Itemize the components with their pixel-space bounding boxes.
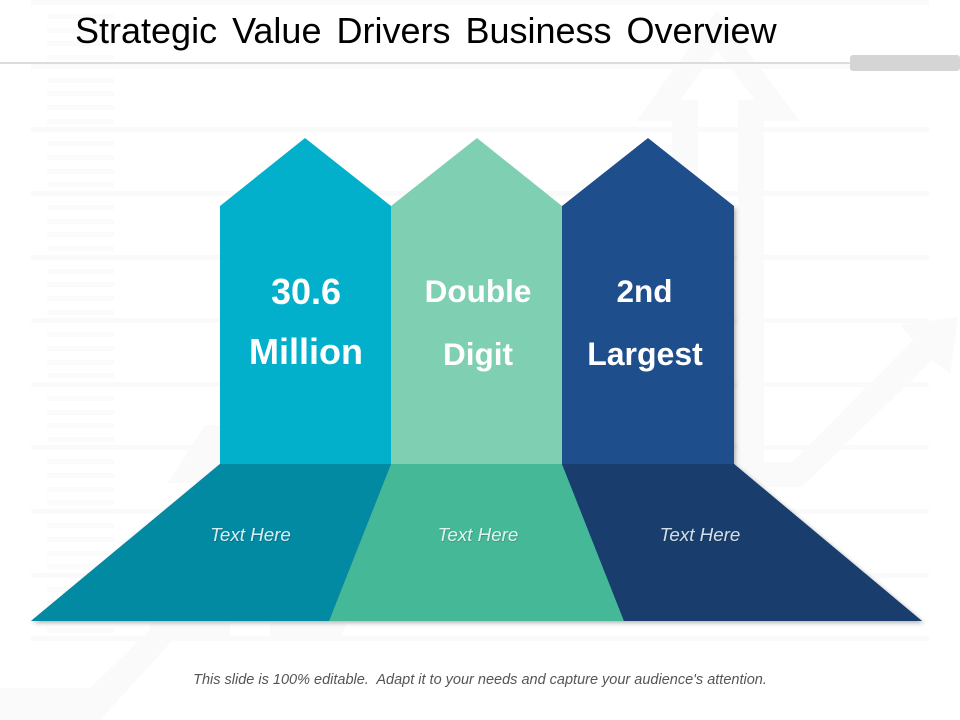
base panel 2: green <box>329 464 624 621</box>
header tab <box>850 55 960 71</box>
arrow 1: cyan: 30.6 <box>271 271 341 312</box>
arrow 3: navy: Largest <box>587 336 703 372</box>
arrow 2: mint: Digit <box>443 336 514 372</box>
title: Strategic Value Drivers Business Overview <box>75 10 778 51</box>
background icon: diagonal arrow right <box>738 317 958 487</box>
arrow 2: mint: Double <box>425 273 531 309</box>
arrow 1: cyan: Million <box>249 331 363 372</box>
diagram: three arrows on a perspective base <box>31 138 922 621</box>
background icon: diagonal arrow left <box>0 623 347 720</box>
arrow 3: navy: 2nd <box>616 273 673 309</box>
base panel 2: green: Text Here <box>438 524 518 545</box>
arrow 1: cyan <box>220 138 391 464</box>
base panel 3: dark navy: Text Here <box>660 524 740 545</box>
footer note: This slide is 100% editable. Adapt it to your needs and capture your audience's attention. <box>193 672 767 688</box>
arrow 2: mint <box>391 138 562 464</box>
background icon: up arrow <box>636 10 800 487</box>
base panel 1: teal <box>31 464 391 621</box>
shadow shape <box>31 206 922 621</box>
background icon: faint diagonal band <box>168 425 220 483</box>
base panel 1: teal: Text Here <box>210 524 291 545</box>
header rule <box>0 62 852 64</box>
arrow 3: navy <box>562 138 734 464</box>
base panel 3: dark navy <box>562 464 922 621</box>
